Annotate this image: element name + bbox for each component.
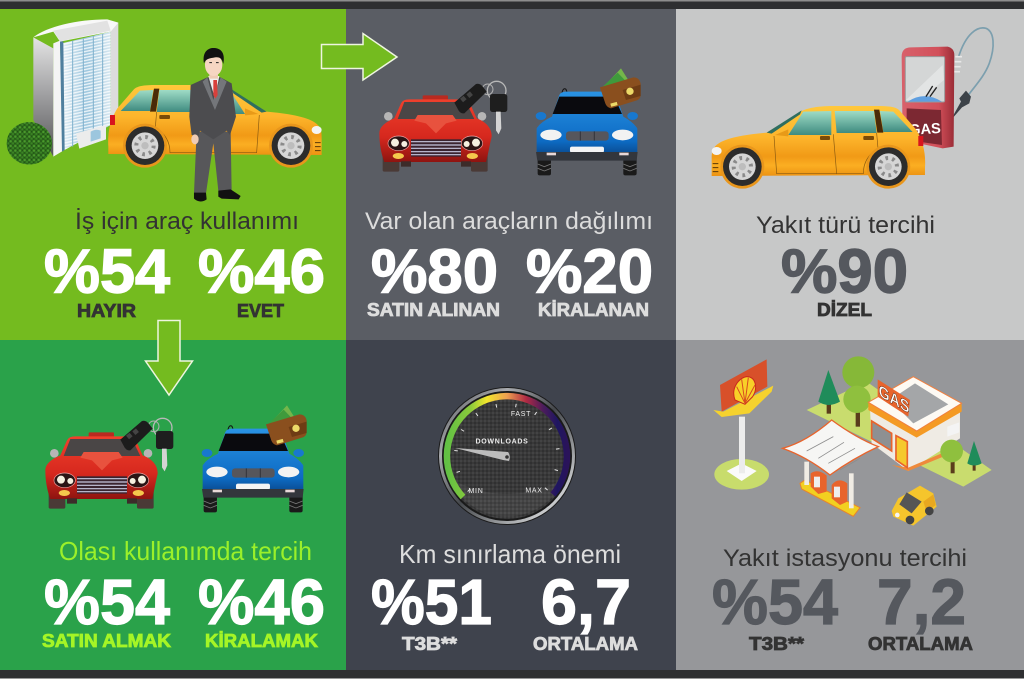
icon: trees (818, 356, 874, 427)
panel: yakıt türü tercihi (712, 28, 993, 320)
icon: yellow car (712, 106, 925, 189)
stat: %54 satın almak: %54 (44, 566, 170, 638)
panel: yakıt istasyonu tercihi (712, 356, 992, 654)
icon: red and blue cars (379, 68, 641, 175)
stat: %51 T3B: %51 (371, 566, 492, 638)
icon: office building (7, 19, 118, 165)
stat: %20 kiralanan: %20 (526, 238, 653, 306)
stat: %90 dizel: DİZEL (817, 300, 872, 320)
chart: speedometer gauge: MAX (525, 488, 543, 494)
heading: Km sınırlama önemi (399, 539, 621, 569)
stat: 7,2 ortalama: 7,2 (877, 566, 966, 638)
panel: km sınırlama önemi (371, 387, 638, 654)
arrow: right (322, 34, 397, 80)
icon: small trees (940, 440, 982, 473)
icon: canopy and pumps (783, 420, 878, 516)
chart: speedometer gauge: FAST (511, 411, 531, 418)
stat: 6,7 ortalama: ORTALAMA (533, 634, 638, 654)
panel: iş için araç kullanımı (7, 19, 325, 321)
heading: Yakıt istasyonu tercihi (723, 545, 967, 572)
icon: businessman (189, 48, 241, 201)
arrow: down (146, 320, 192, 395)
icon: shell sign (713, 359, 773, 490)
heading: Olası kullanımda tercih (59, 536, 312, 566)
chart: speedometer gauge (438, 387, 576, 525)
stat: %90 dizel: %90 (781, 238, 908, 306)
icon: gas station scene (713, 356, 992, 526)
ground (807, 382, 992, 487)
icon: yellow car (108, 85, 322, 168)
panel: var olan araçların dağılımı (365, 68, 653, 320)
heading: İş için araç kullanımı (75, 208, 299, 235)
stat: %54 hayır: HAYIR (77, 301, 136, 321)
heading: Var olan araçların dağılımı (365, 208, 653, 235)
stat: %54 T3B: T3B** (749, 634, 804, 654)
stat: %54 hayır: %54 (44, 238, 171, 306)
panel: olası kullanımda tercih (42, 405, 325, 651)
stat: 6,7 ortalama (533, 566, 638, 654)
chart: speedometer gauge: MIN (469, 488, 483, 495)
icon: small yellow car (892, 486, 937, 526)
icon: fuel pump: GAS (909, 121, 942, 139)
stat: %20 kiralanan: KİRALANAN (538, 300, 649, 320)
stat: %54 satın almak: SATIN ALMAK (42, 631, 171, 651)
stat: 6,7 ortalama: 6,7 (541, 566, 631, 638)
stat: %46 evet: %46 (198, 238, 325, 306)
icon: station building: GAS (879, 381, 909, 418)
stat: %46 kiralamak: %46 (198, 566, 325, 638)
icon: station building (868, 377, 962, 471)
chart: speedometer gauge: DOWNLOADS (476, 438, 528, 446)
stat: %46 kiralamak: KİRALAMAK (205, 631, 318, 651)
stat: %80 satın alınan: %80 (371, 238, 498, 306)
heading: Yakıt türü tercihi (756, 212, 935, 239)
stat: %51 T3B: T3B** (402, 634, 457, 654)
stat: %46 evet: EVET (237, 301, 284, 321)
stat: %54 T3B: %54 (712, 566, 838, 638)
stat: %80 satın alınan: SATIN ALINAN (367, 300, 500, 320)
icon: fuel pump (902, 28, 993, 148)
stat: 7,2 ortalama: ORTALAMA (868, 634, 973, 654)
stat: 7,2 ortalama (868, 566, 973, 654)
icon: red and blue cars (45, 405, 307, 512)
